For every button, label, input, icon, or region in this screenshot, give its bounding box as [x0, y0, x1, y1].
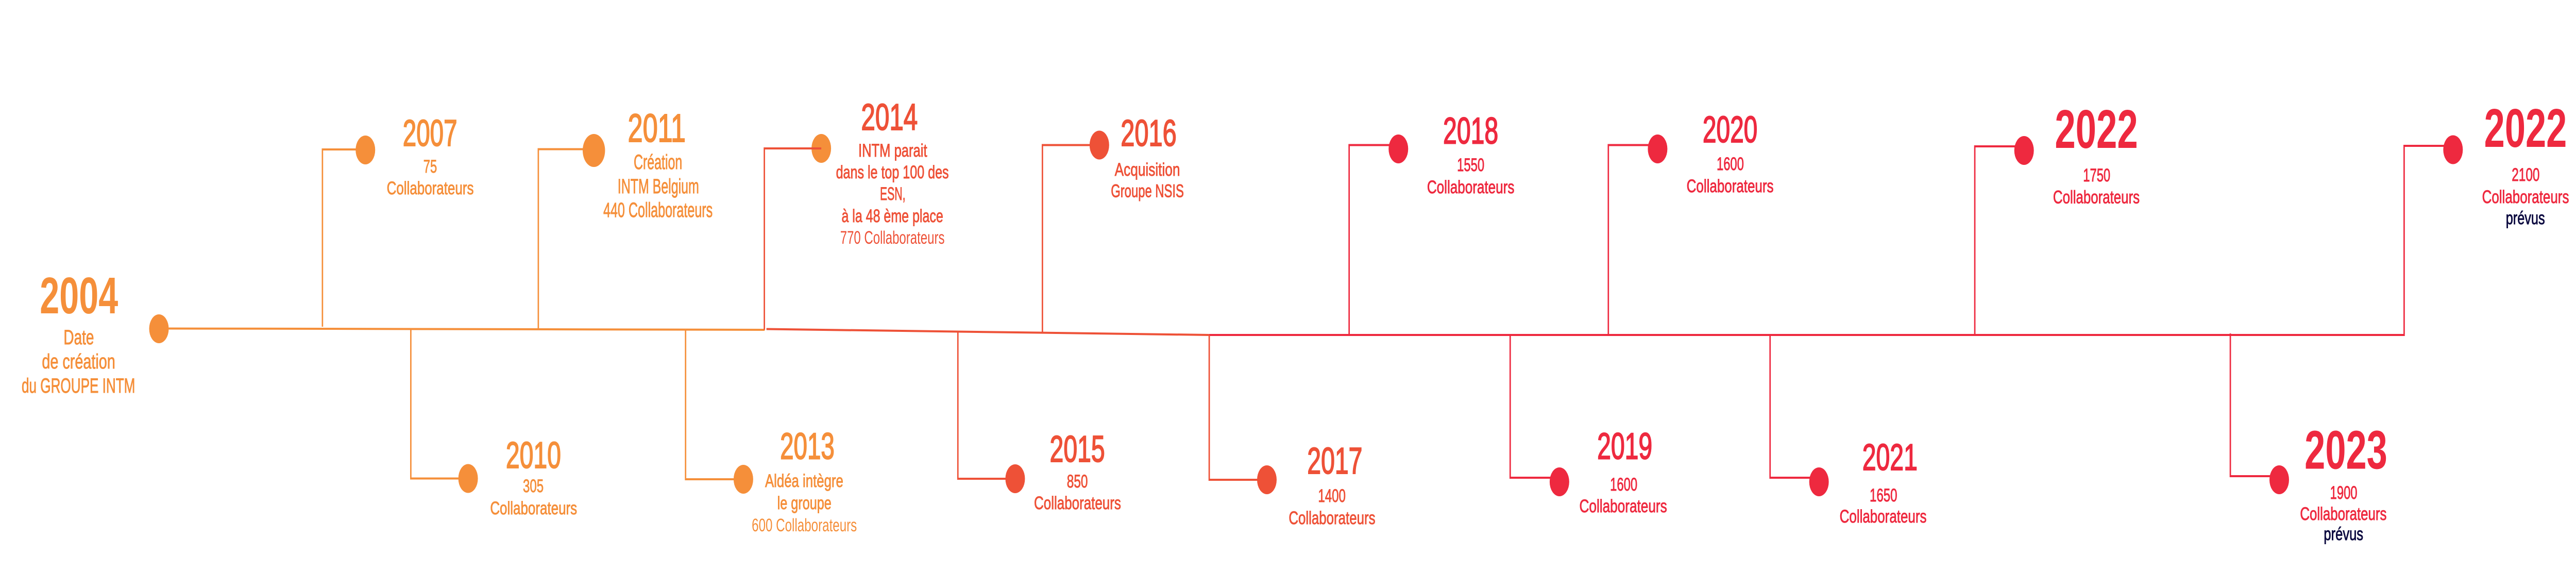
year 2022 forecast: 2022 [2484, 98, 2567, 159]
description 2018: Collaborateurs [1427, 178, 1514, 197]
connector 2021 [1770, 335, 1819, 478]
description 2013: le groupe [777, 494, 832, 513]
dot 2022 [2014, 136, 2034, 165]
description 2016: Groupe NSIS [1111, 181, 1184, 201]
description 2018: 1550 [1457, 156, 1484, 175]
milestone 2015 [958, 331, 1121, 513]
milestone 2023 [2230, 333, 2387, 544]
description 2022: Collaborateurs [2053, 188, 2140, 208]
description 2017: Collaborateurs [1289, 509, 1376, 528]
description 2022 forecast: prévus [2506, 209, 2545, 228]
description 2019: 1600 [1610, 475, 1637, 495]
description 2014: dans le top 100 des [836, 163, 949, 182]
milestone 2010 [411, 329, 577, 518]
description 2004: de création [42, 350, 115, 373]
milestone 2007 [323, 113, 473, 327]
milestone 2017 [1209, 335, 1376, 528]
dot 2010 [459, 464, 478, 493]
description 2020: 1600 [1717, 155, 1744, 174]
description 2004: Date [63, 326, 94, 349]
year 2004: 2004 [40, 267, 118, 325]
year 2018: 2018 [1443, 110, 1498, 152]
dot 2016 [1090, 131, 1109, 160]
description 2022 [2053, 166, 2140, 208]
milestone 2011 [538, 106, 713, 329]
description 2010: Collaborateurs [490, 499, 577, 518]
description 2011: INTM Belgium [618, 175, 699, 198]
description 2013: Aldéa intègre [765, 472, 843, 491]
connector 2013 [686, 330, 743, 479]
description 2021 [1840, 486, 1926, 527]
description 2010: 305 [523, 477, 544, 496]
description 2015: 850 [1067, 472, 1088, 492]
dot 2017 [1257, 465, 1277, 494]
connector 2010 [411, 329, 468, 478]
description 2021: Collaborateurs [1840, 507, 1926, 527]
description 2004: du GROUPE INTM [22, 375, 135, 397]
description 2019: Collaborateurs [1580, 497, 1667, 516]
year 2023: 2023 [2304, 420, 2387, 481]
description 2014: INTM parait [858, 141, 927, 161]
milestone 2018 [1349, 110, 1514, 335]
connector 2017 [1209, 335, 1267, 480]
milestone 2004 [22, 267, 169, 397]
connector 2018 [1349, 145, 1398, 335]
connector 2007 [323, 149, 365, 327]
milestone 2014 [765, 97, 949, 330]
description 2022 forecast: Collaborateurs [2482, 188, 2569, 207]
description 2022: 1750 [2083, 166, 2110, 186]
year 2014: 2014 [861, 97, 918, 138]
connector 2020 [1608, 145, 1657, 335]
dot 2004 [149, 314, 169, 343]
year 2013: 2013 [780, 426, 835, 467]
year 2020: 2020 [1703, 109, 1757, 150]
connector 2014 [765, 148, 821, 330]
description 2018 [1427, 156, 1514, 197]
description 2023 [2300, 483, 2386, 544]
year 2017: 2017 [1307, 441, 1362, 482]
dot 2021 [1809, 467, 1829, 496]
connector 2016 [1042, 145, 1099, 332]
description 2011: 440 Collaborateurs [603, 199, 713, 222]
dot 2007 [355, 136, 375, 164]
dot 2015 [1005, 464, 1025, 493]
milestone 2016 [1042, 113, 1184, 332]
description 2022 forecast: 2100 [2512, 165, 2539, 185]
description 2015 [1034, 472, 1121, 513]
connector 2019 [1510, 335, 1560, 478]
connector 2022 [1975, 146, 2024, 335]
dot 2011 [583, 134, 605, 167]
description 2014: 770 Collaborateurs [840, 228, 944, 248]
milestone 2021 [1770, 335, 1926, 527]
description 2010 [490, 477, 577, 518]
connector 2015 [958, 331, 1015, 479]
year 2015: 2015 [1050, 429, 1105, 470]
dot 2022 forecast [2443, 135, 2463, 164]
description 2013: 600 Collaborateurs [752, 516, 857, 535]
year 2016: 2016 [1121, 113, 1177, 154]
description 2020 [1687, 155, 1774, 196]
description 2013 [752, 472, 857, 535]
description 2007: 75 [423, 157, 437, 177]
dot 2013 [734, 465, 753, 494]
description 2017 [1289, 486, 1376, 528]
connector 2011 [538, 149, 594, 329]
description 2014 [836, 141, 949, 248]
description 2007: Collaborateurs [387, 179, 473, 198]
description 2014: à la 48 ème place [841, 207, 943, 226]
year 2011: 2011 [628, 106, 686, 150]
description 2023: prévus [2324, 525, 2363, 544]
description 2011 [603, 151, 713, 222]
year 2010: 2010 [506, 435, 561, 476]
main timeline axis [169, 329, 2404, 335]
description 2011: Création [634, 151, 682, 174]
description 2014: ESN, [880, 184, 906, 204]
description 2023: 1900 [2330, 483, 2358, 503]
description 2015: Collaborateurs [1034, 494, 1121, 513]
dot 2019 [1550, 467, 1569, 496]
description 2021: 1650 [1870, 486, 1897, 506]
milestone 2020 [1608, 109, 1774, 335]
milestone 2019 [1510, 335, 1667, 516]
description 2004 [22, 326, 135, 397]
dot 2020 [1648, 135, 1667, 163]
year 2019: 2019 [1597, 426, 1652, 467]
description 2023: Collaborateurs [2300, 505, 2386, 524]
milestone 2022 (1750) [1975, 99, 2140, 335]
description 2020: Collaborateurs [1687, 177, 1774, 196]
description 2022 forecast [2482, 165, 2569, 228]
dot 2023 [2269, 465, 2289, 494]
year 2007: 2007 [403, 113, 457, 154]
dot 2014 [811, 134, 831, 163]
milestone 2013 [686, 330, 857, 535]
connector 2023 [2230, 333, 2279, 476]
year 2021: 2021 [1862, 437, 1918, 478]
description 2016 [1111, 160, 1184, 201]
description 2016: Acquisition [1115, 160, 1180, 180]
description 2007 [387, 157, 473, 198]
description 2019 [1580, 475, 1667, 516]
year 2022: 2022 [2055, 99, 2138, 160]
milestone 2022 (2100) [2404, 98, 2569, 336]
description 2017: 1400 [1318, 486, 1346, 506]
connector 2022 forecast [2404, 146, 2453, 336]
dot 2018 [1388, 135, 1408, 163]
